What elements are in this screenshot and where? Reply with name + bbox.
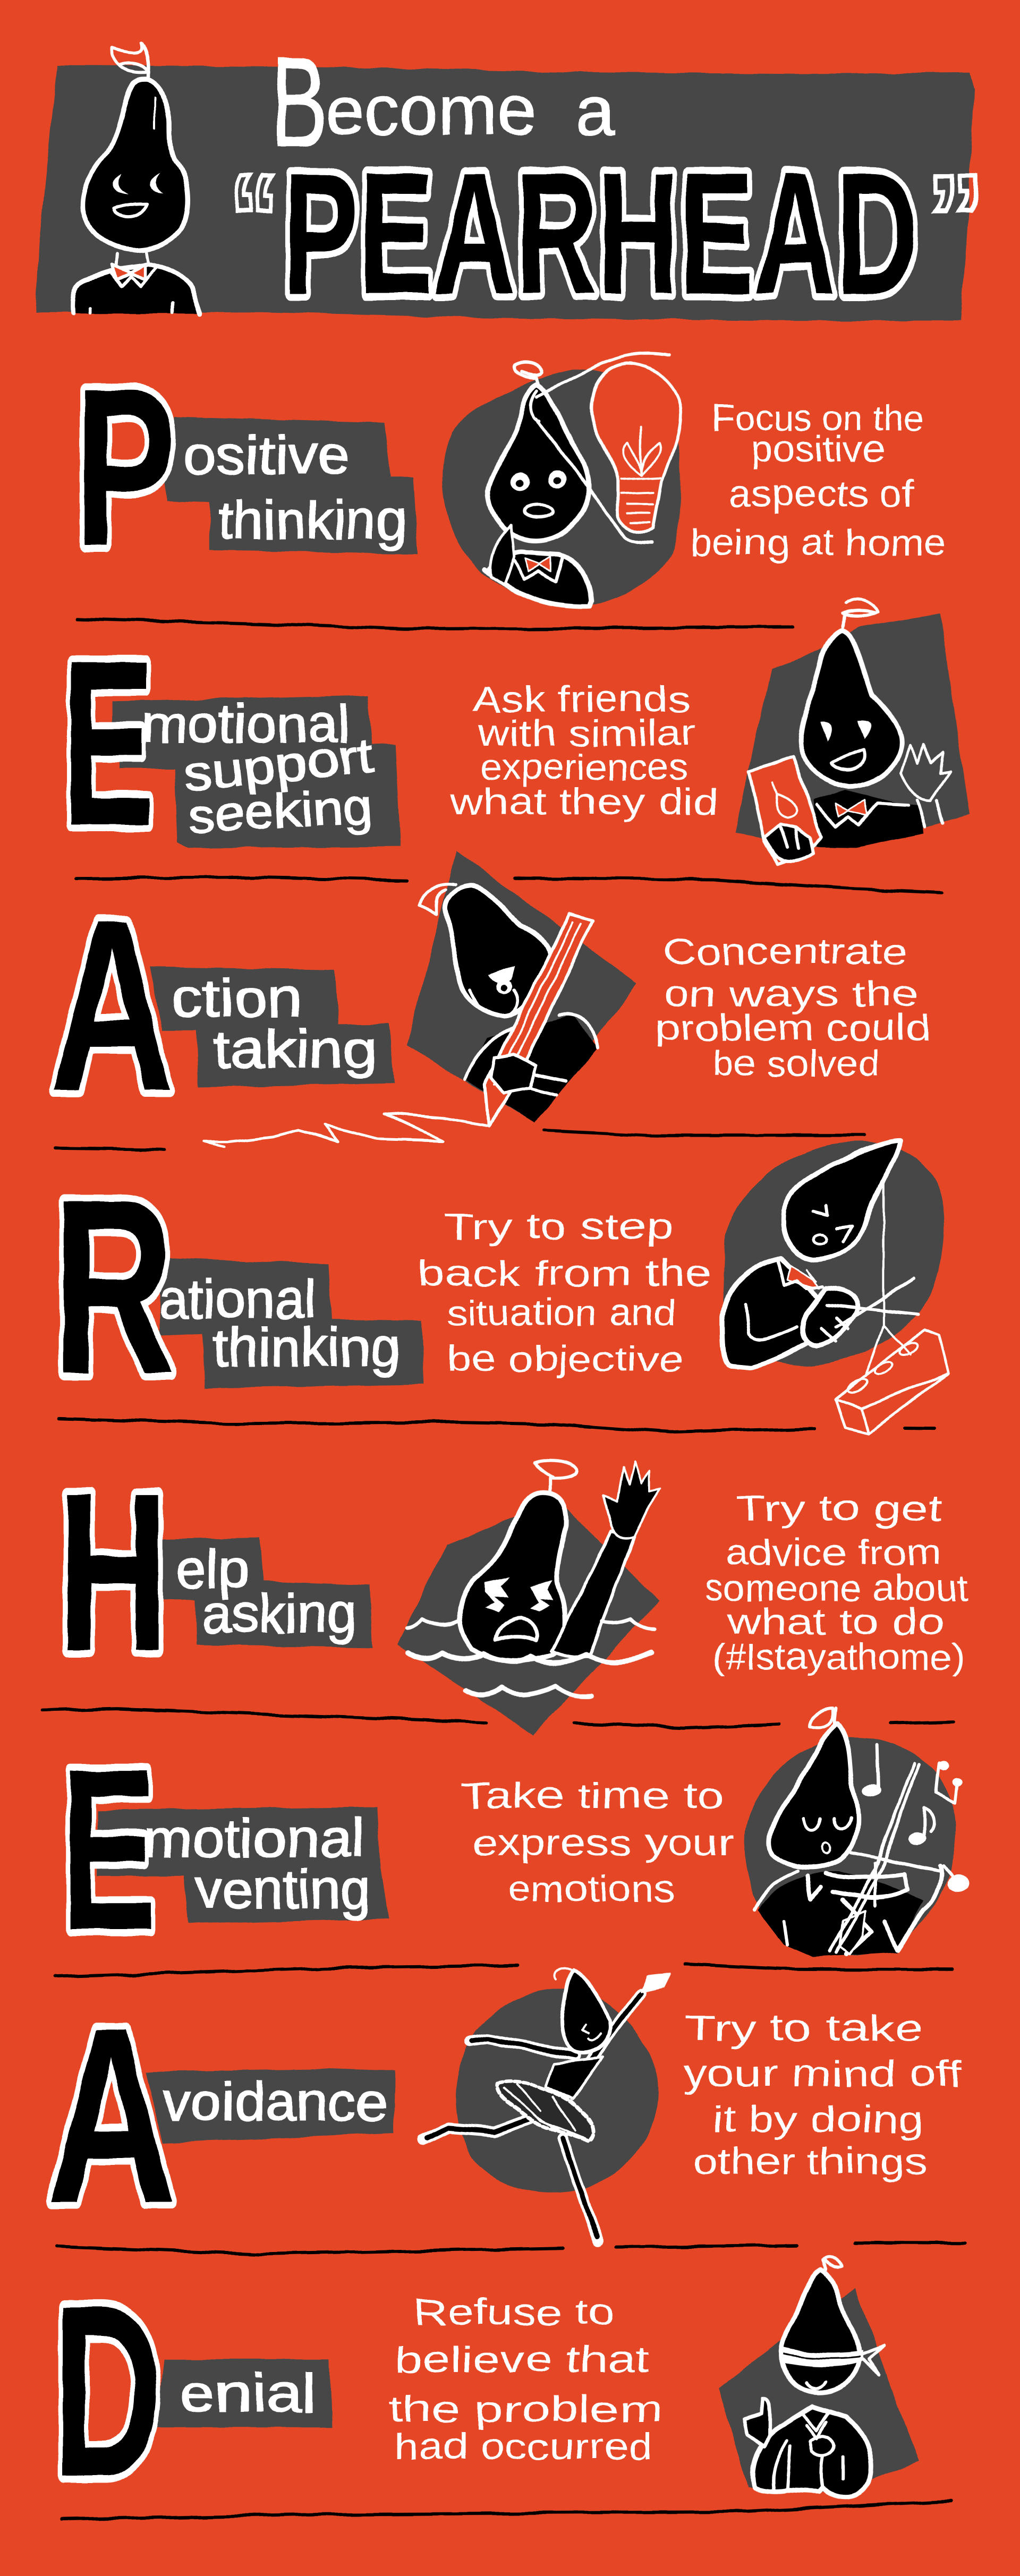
label: elp asking: asking [202,1583,356,1644]
label: ction taking: taking [214,1019,377,1079]
label panel [150,967,395,1087]
label: motional venting [143,1808,371,1920]
illustration: pear with lightbulb [443,354,681,608]
description: Focus on the [712,397,924,439]
heading: Become a: B [271,31,327,173]
title panel background [36,65,974,321]
big letter H: H [58,1446,168,1699]
description: Try to get [736,1487,941,1529]
illustration: blindfolded pear with thumb up [719,2256,919,2497]
description: other things [693,2140,927,2182]
description: Concentrate [664,931,907,972]
label: elp asking: elp [176,1539,249,1599]
description: had occurred [394,2426,652,2467]
label panel [159,1257,424,1388]
label: voidance: voidance [163,2071,387,2132]
description: back from the [418,1252,712,1294]
big letter P: P [74,342,176,593]
description: advice from [725,1532,941,1573]
label: motional support seeking: motional [142,694,350,754]
description: problem could [656,1007,930,1048]
big letter A: A [47,1976,176,2256]
label: motional support seeking [142,694,376,843]
description: believe that [395,2339,649,2380]
label: ositive thinking [183,425,406,550]
section: Emotional support seeking [62,599,970,874]
label: motional support seeking: support [181,728,376,802]
description [683,2007,963,2182]
description [418,1206,712,1379]
heading: Become a: ecome a [325,71,615,149]
description: someone about [704,1567,968,1609]
description: being at home [690,522,947,563]
heading: closing quote mark: ” [927,148,985,291]
label: elp asking [176,1539,356,1644]
big letter A: A [50,869,174,1142]
section: Help asking [58,1446,968,1735]
title pear character [73,42,200,314]
big letter R: R [53,1148,175,1426]
description: experiences [480,746,688,788]
label panel [98,1807,388,1923]
label panel [112,695,400,848]
section: Denial [53,2255,919,2527]
label: motional venting: motional [143,1808,364,1869]
label: ction taking [171,968,377,1079]
title banner [36,31,985,330]
description [690,397,947,563]
section: Action taking [50,851,930,1147]
description: Refuse to [413,2291,615,2333]
description: Take time to [461,1775,724,1816]
description: it by doing [712,2099,924,2140]
label panel [147,2069,395,2142]
label: ational thinking [158,1269,400,1378]
description: Try to take [684,2007,922,2049]
description: what they did [449,781,719,822]
illustration: pear drawing with pencil [205,851,636,1147]
section: Positive thinking [74,342,947,608]
illustration: pear ballerina [421,1968,670,2241]
description: on ways the [664,973,919,1014]
description [388,2291,662,2467]
section: Emotional venting [61,1708,970,1978]
description [704,1487,968,1677]
description: Ask friends [472,678,690,720]
description: situation and [447,1292,676,1333]
label: ational thinking: ational [158,1269,317,1329]
label: motional venting: venting [195,1859,371,1920]
description: be solved [712,1043,880,1084]
label: enial: enial [179,2363,317,2424]
description: be objective [447,1338,683,1379]
description: the problem [388,2389,662,2430]
description: emotions [507,1868,675,1909]
description: Try to step [444,1206,673,1247]
section: Rational thinking [53,1140,948,1433]
big letter D: D [53,2255,163,2527]
description [461,1775,734,1909]
description: with similar [478,712,696,754]
description: aspects of [728,473,914,514]
illustration: pear playing violin [744,1708,970,1958]
heading: opening quote mark: “ [230,148,278,291]
label panel [156,2359,332,2427]
illustration: drowning pear raising hand [397,1461,660,1735]
label: ositive thinking: ositive [183,425,350,485]
description: (#Istayathome) [712,1636,964,1677]
big letter E: E [61,1721,157,1978]
label: ositive thinking: thinking [218,490,406,550]
big letter E: E [62,611,155,874]
label panel [164,416,418,553]
description [449,678,719,822]
illustration: pear cutting string with scissors [722,1140,948,1433]
label: ction taking: ction [171,968,302,1028]
label panel [159,1537,372,1647]
description: your mind off [683,2053,963,2094]
description: positive [751,428,885,470]
label: motional support seeking: seeking [186,779,375,843]
description: what to do [727,1601,944,1642]
description [656,931,930,1084]
label: ational thinking: thinking [214,1317,400,1378]
description: express your [472,1822,734,1863]
section: Avoidance [47,1968,963,2256]
illustration: pear with phone [735,599,970,864]
